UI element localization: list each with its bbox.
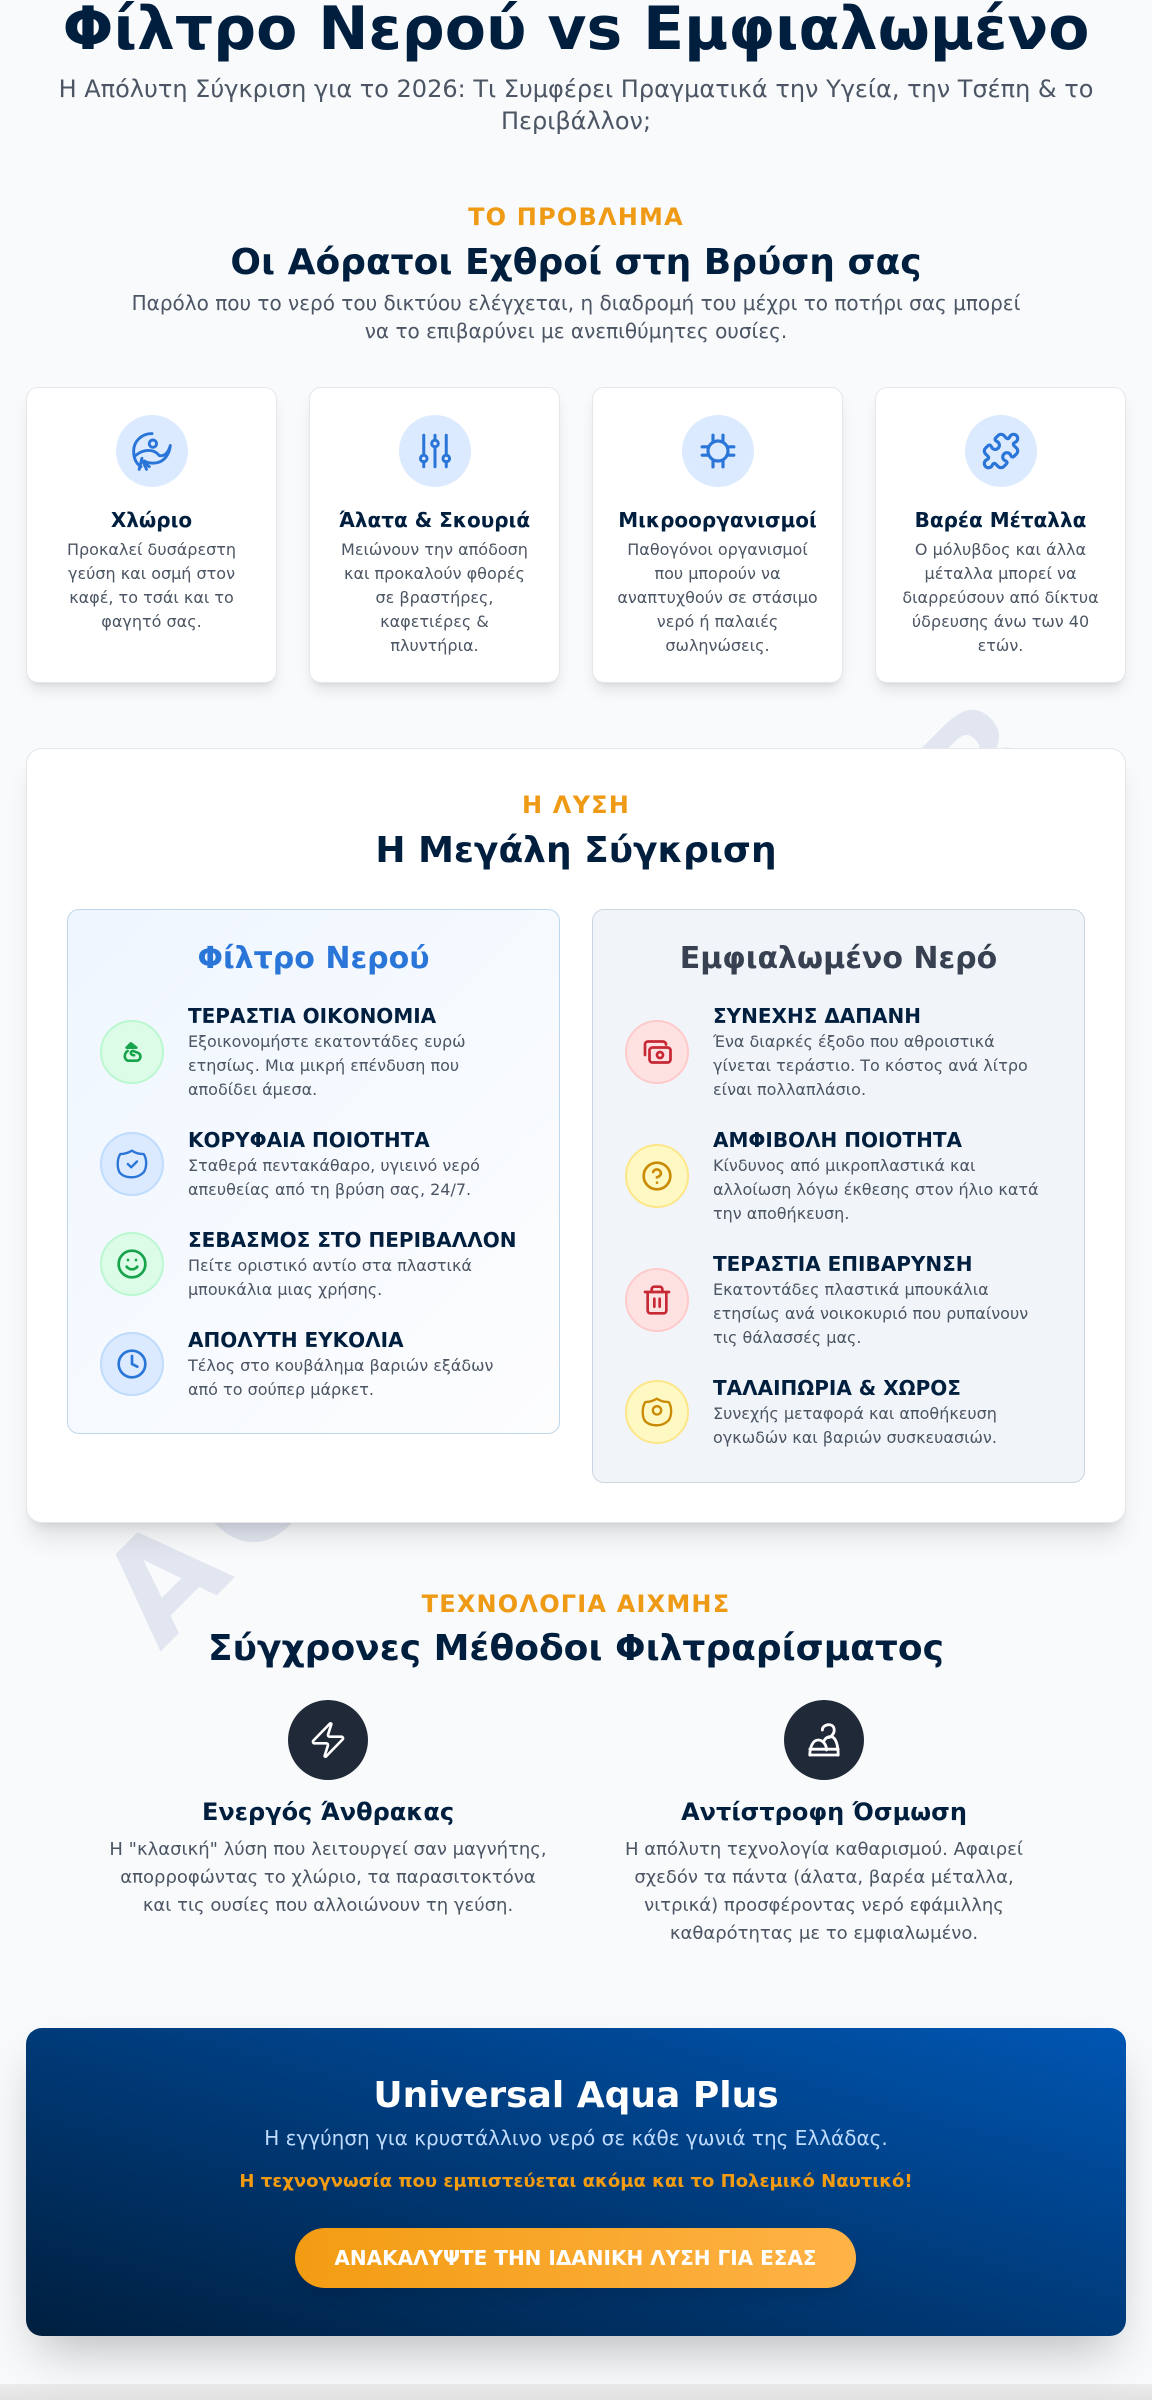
panel heading: bottled water: Εμφιαλωμένο Νερό — [680, 941, 997, 976]
card title: Χλώριο — [111, 508, 192, 532]
icon: reverse osmosis — [784, 1700, 864, 1780]
brand heading: Universal Aqua Plus — [373, 2075, 779, 2116]
item title: ΑΜΦΙΒΟΛΗ ΠΟΙΟΤΗΤΑ — [713, 1128, 962, 1152]
card title: Βαρέα Μέταλλα — [915, 508, 1086, 532]
item text: την αποθήκευση. — [713, 1204, 849, 1223]
panel: bottled water — [592, 909, 1085, 1483]
panel: call to action — [26, 2028, 1126, 2336]
tech text: και τις ουσίες που αλλοιώνουν τη γεύση. — [143, 1895, 513, 1916]
icon: savings — [100, 1020, 164, 1084]
card text: Παθογόνοι οργανισμοί — [627, 540, 808, 559]
item text: ετησίως. Μια μικρή επένδυση που — [188, 1056, 459, 1075]
cta button — [295, 2228, 856, 2288]
section heading: technology: Σύγχρονες Μέθοδοι Φιλτραρίσματος — [208, 1628, 944, 1669]
item title: ΑΠΟΛΥΤΗ ΕΥΚΟΛΙΑ — [188, 1328, 404, 1352]
card text: μέταλλα μπορεί να — [925, 564, 1076, 583]
item text: Κίνδυνος από μικροπλαστικά και — [713, 1156, 975, 1175]
tech text: Η απόλυτη τεχνολογία καθαρισμού. Αφαιρεί — [625, 1839, 1023, 1860]
tech text: απορροφώντας το χλώριο, τα παρασιτοκτόνα — [120, 1867, 536, 1888]
card text — [617, 540, 818, 655]
section intro text: να το επιβαρύνει με ανεπιθύμητες ουσίες. — [365, 319, 787, 343]
card text: και προκαλούν φθορές — [344, 564, 525, 583]
tech text — [625, 1839, 1023, 1944]
subtitle: Περιβάλλον; — [501, 107, 651, 135]
card text: σε βραστήρες, — [376, 588, 493, 607]
bottom strip — [0, 2384, 1152, 2400]
item text — [712, 1032, 1028, 1099]
icon: quality shield — [100, 1132, 164, 1196]
item text — [188, 1032, 466, 1099]
section label: problem: ΤΟ ΠΡΟΒΛΗΜΑ — [468, 203, 684, 231]
section intro text: Παρόλο που το νερό του δικτύου ελέγχεται, η διαδρομή του μέχρι το ποτήρι σας μπορεί — [132, 291, 1020, 315]
item text: Ένα διαρκές έξοδο που αθροιστικά — [713, 1032, 995, 1051]
tech text — [109, 1839, 547, 1916]
item text: αλλοίωση λόγω έκθεσης στον ήλιο κατά — [713, 1180, 1039, 1199]
tech title: Αντίστροφη Όσμωση — [681, 1798, 967, 1826]
icon: chlorine — [116, 415, 188, 487]
tech text: νιτρικά) προσφέροντας νερό εφάμιλλης — [644, 1895, 1004, 1916]
item title: ΤΕΡΑΣΤΙΑ ΕΠΙΒΑΡΥΝΣΗ — [713, 1252, 972, 1276]
icon: activated carbon — [288, 1700, 368, 1780]
cta subtitle: Η εγγύηση για κρυστάλλινο νερό σε κάθε γωνιά της Ελλάδας. — [264, 2126, 888, 2150]
item text — [188, 1156, 480, 1199]
icon: smile — [100, 1232, 164, 1296]
card text — [341, 540, 528, 655]
card text: Ο μόλυβδος και άλλα — [915, 540, 1086, 559]
panel: heavy metals card — [875, 387, 1126, 683]
item text — [713, 1404, 997, 1447]
icon: clock — [100, 1332, 164, 1396]
card text: που μπορούν να — [654, 564, 781, 583]
panel heading: water filter: Φίλτρο Νερού — [197, 941, 430, 976]
icon: sliders — [399, 415, 471, 487]
card text: πλυντήρια. — [390, 636, 479, 655]
item text — [713, 1280, 1028, 1347]
item text — [188, 1256, 472, 1299]
item text: αποδίδει άμεσα. — [188, 1080, 317, 1099]
card text: διαρρεύσουν από δίκτυα — [902, 588, 1099, 607]
icon: money — [625, 1020, 689, 1084]
panel: solution comparison — [26, 748, 1126, 1523]
icon: trash — [625, 1268, 689, 1332]
cta highlight: Η τεχνογνωσία που εμπιστεύεται ακόμα και το Πολεμικό Ναυτικό! — [239, 2171, 913, 2192]
section intro text — [132, 291, 1020, 343]
card text: καφέ, το τσάι και το — [69, 588, 234, 607]
item text: ογκωδών και βαριών συσκευασιών. — [713, 1428, 997, 1447]
tech text: καθαρότητας με το εμφιαλωμένο. — [670, 1923, 978, 1944]
item text — [713, 1156, 1039, 1223]
item text: Πείτε οριστικό αντίο στα πλαστικά — [188, 1256, 472, 1275]
item text: από το σούπερ μάρκετ. — [188, 1380, 374, 1399]
card text — [67, 540, 236, 631]
item text: ετησίως ανά νοικοκυριό που ρυπαίνουν — [713, 1304, 1028, 1323]
card text: φαγητό σας. — [101, 612, 202, 631]
panel: water filter — [67, 909, 560, 1434]
item text: τις θάλασσές μας. — [713, 1328, 861, 1347]
cta button: ΑΝΑΚΑΛΥΨΤΕ ΤΗΝ ΙΔΑΝΙΚΗ ΛΥΣΗ ΓΙΑ ΕΣΑΣ — [334, 2246, 817, 2270]
item text — [188, 1356, 493, 1399]
item title: ΤΑΛΑΙΠΩΡΙΑ & ΧΩΡΟΣ — [713, 1376, 961, 1400]
card text: ετών. — [978, 636, 1023, 655]
tech title: Ενεργός Άνθρακας — [202, 1798, 454, 1826]
item title: ΣΥΝΕΧΗΣ ΔΑΠΑΝΗ — [713, 1004, 921, 1028]
card text: αναπτυχθούν σε στάσιμο — [617, 588, 818, 607]
card title: Άλατα & Σκουριά — [339, 508, 530, 532]
item text: απευθείας από τη βρύση σας, 24/7. — [188, 1180, 471, 1199]
watermark: R — [887, 668, 1076, 857]
section label: technology: ΤΕΧΝΟΛΟΓΙΑ ΑΙΧΜΗΣ — [422, 1590, 730, 1618]
item text: Εκατοντάδες πλαστικά μπουκάλια — [713, 1280, 989, 1299]
card text: ύδρευσης άνω των 40 — [912, 612, 1089, 631]
card text — [902, 540, 1099, 655]
section label: solution: Η ΛΥΣΗ — [522, 791, 630, 819]
panel: microorganisms card — [592, 387, 843, 683]
panel: salts card — [309, 387, 560, 683]
section heading: problem: Οι Αόρατοι Εχθροί στη Βρύση σας — [230, 242, 922, 283]
item text: γίνεται τεράστιο. Το κόστος ανά λίτρο — [713, 1056, 1028, 1075]
item text: είναι πολλαπλάσιο. — [713, 1080, 866, 1099]
card text: καφετιέρες & — [380, 612, 489, 631]
item title: ΣΕΒΑΣΜΟΣ ΣΤΟ ΠΕΡΙΒΑΛΛΟΝ — [188, 1228, 516, 1252]
icon: question — [625, 1144, 689, 1208]
card text: νερό ή παλαιές — [657, 612, 778, 631]
panel: chlorine card — [26, 387, 277, 683]
item title: ΚΟΡΥΦΑΙΑ ΠΟΙΟΤΗΤΑ — [188, 1128, 430, 1152]
item text: Συνεχής μεταφορά και αποθήκευση — [713, 1404, 997, 1423]
icon: puzzle — [965, 415, 1037, 487]
item text: μπουκάλια μιας χρήσης. — [188, 1280, 382, 1299]
item text: Εξοικονομήστε εκατοντάδες ευρώ — [188, 1032, 466, 1051]
card text: Προκαλεί δυσάρεστη — [67, 540, 236, 559]
card text: Μειώνουν την απόδοση — [341, 540, 528, 559]
item text: Τέλος στο κουβάλημα βαριών εξάδων — [188, 1356, 493, 1375]
card text: γεύση και οσμή στον — [68, 564, 235, 583]
icon: storage — [625, 1380, 689, 1444]
item title: ΤΕΡΑΣΤΙΑ ΟΙΚΟΝΟΜΙΑ — [188, 1004, 436, 1028]
tech text: σχεδόν τα πάντα (άλατα, βαρέα μέταλλα, — [634, 1867, 1014, 1888]
item text: Σταθερά πεντακάθαρο, υγιεινό νερό — [188, 1156, 480, 1175]
subtitle: Η Απόλυτη Σύγκριση για το 2026: Τι Συμφέρει Πραγματικά την Υγεία, την Τσέπη & το — [59, 75, 1093, 103]
watermark: AO — [69, 1380, 364, 1675]
subtitle — [59, 75, 1093, 135]
icon: microbe — [682, 415, 754, 487]
section heading: solution: Η Μεγάλη Σύγκριση — [375, 830, 777, 871]
card title: Μικροοργανισμοί — [618, 508, 817, 532]
card text: σωληνώσεις. — [665, 636, 770, 655]
tech text: Η "κλασική" λύση που λειτουργεί σαν μαγνήτης, — [109, 1839, 547, 1860]
